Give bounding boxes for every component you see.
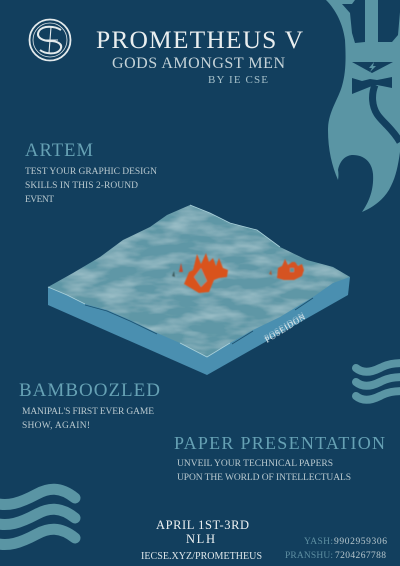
icon: IE CSE logo [30, 20, 70, 60]
text block: Bamboozled description [22, 407, 154, 431]
terrain edge shadows [85, 298, 313, 344]
small red island [269, 259, 304, 280]
contacts: 9902959306 [334, 537, 387, 547]
terrain ridge highlights [48, 205, 280, 357]
map: isometric ocean terrain [48, 205, 350, 375]
text block: Artem description: EVENT [25, 195, 54, 205]
event date and venue: NLH [186, 532, 215, 546]
heading: Bamboozled: BAMBOOZLED [19, 380, 160, 401]
title: PROMETHEUS V [96, 25, 304, 54]
terrain label: POSEIDON [263, 312, 307, 345]
event date and venue: APRIL 1ST-3RD [156, 518, 249, 532]
text block: Artem description [25, 167, 157, 205]
text block: Paper Presentation description: UPON THE WORLD OF INTELLECTUALS [177, 473, 351, 483]
icon: trident helmet motif [326, 0, 400, 212]
terrain label: POSEIDON [262, 310, 306, 343]
contacts [285, 537, 387, 561]
text block: Paper Presentation description [177, 459, 351, 483]
event website: IECSE.XYZ/PROMETHEUS [141, 551, 262, 562]
contacts: PRANSHU: [285, 551, 333, 561]
text block: Bamboozled description: MANIPAL'S FIRST EVER GAME [22, 407, 154, 417]
contacts: 7204267788 [335, 551, 386, 561]
heading: Artem: ARTEM [25, 141, 93, 161]
icon: waves right [356, 363, 400, 400]
event date and venue [156, 518, 249, 546]
text block: Artem description: SKILLS IN THIS 2-ROUND [25, 181, 138, 191]
icon: waves left [0, 489, 75, 545]
contacts: YASH: [304, 537, 333, 547]
text block: Artem description: TEST YOUR GRAPHIC DESIGN [25, 167, 157, 177]
terrain surface [48, 205, 350, 357]
subtitle: GODS AMONGST MEN [112, 55, 285, 72]
large red island [172, 253, 228, 293]
terrain base slab [48, 270, 350, 375]
text block: Paper Presentation description: UNVEIL YOUR TECHNICAL PAPERS [177, 459, 333, 469]
text block: Bamboozled description: SHOW, AGAIN! [22, 421, 90, 431]
byline: BY IE CSE [208, 74, 268, 86]
heading: Paper Presentation: PAPER PRESENTATION [174, 433, 385, 453]
